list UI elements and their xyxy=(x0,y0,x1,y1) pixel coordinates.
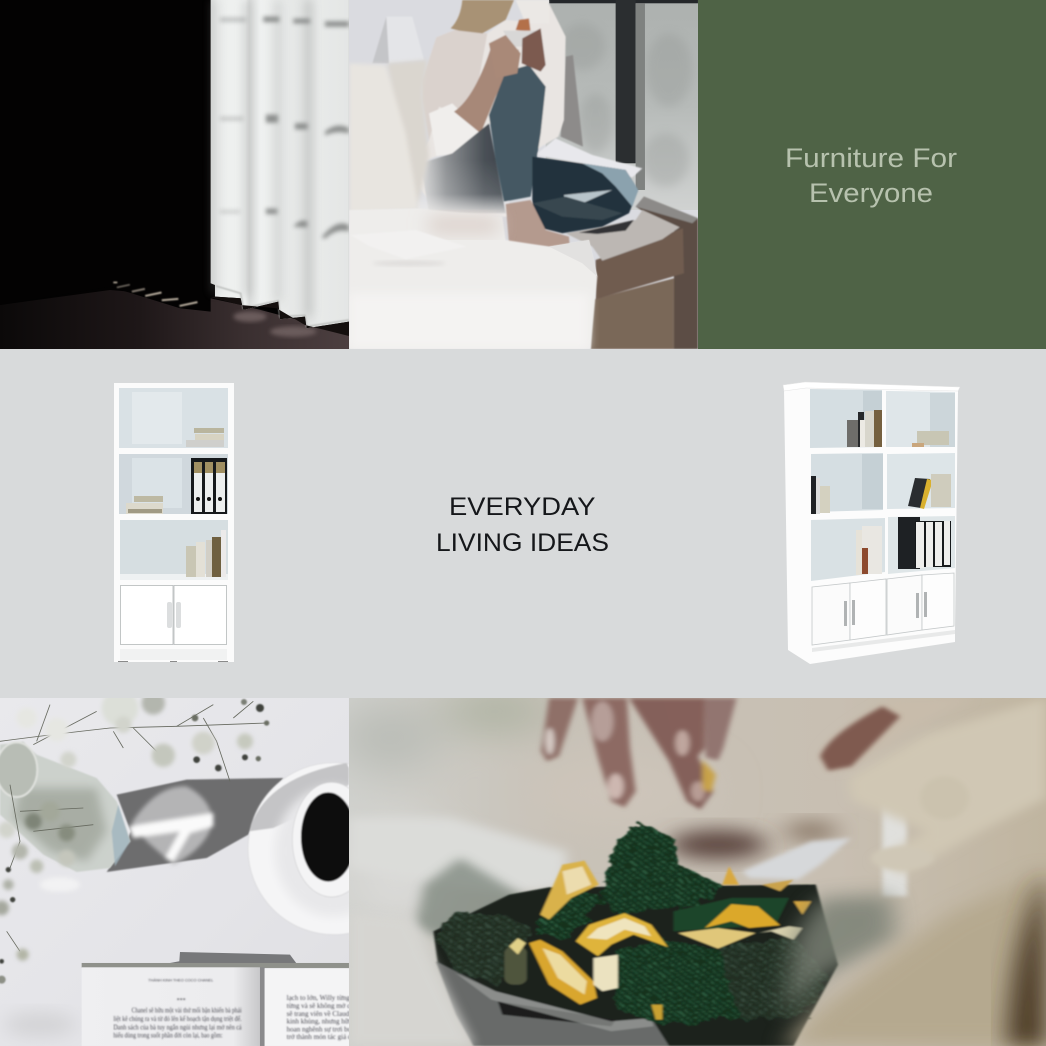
open book xyxy=(82,952,363,1046)
white throw xyxy=(349,208,597,349)
shelf compartments xyxy=(119,388,228,448)
arm xyxy=(454,43,519,133)
white sheer curtain xyxy=(211,0,349,328)
wall ornament xyxy=(372,17,424,63)
open book: THÀNH KINH THEO COCO CHANEL xyxy=(148,978,213,982)
glass vase xyxy=(0,741,131,892)
thigh xyxy=(421,123,506,213)
white stick xyxy=(882,790,907,896)
open book: liệt kê chúng ra và từ đó lên kế hoạch tận dụng triệt để. xyxy=(113,1015,242,1023)
panel: coffee and book flat lay xyxy=(0,698,349,1046)
lower leg xyxy=(532,157,638,233)
foot xyxy=(506,200,570,247)
books: top shelf xyxy=(186,428,224,447)
open book: từng và sẽ không mở cửa xyxy=(287,1002,357,1010)
door handles xyxy=(844,592,927,626)
left bookshelf xyxy=(114,383,234,662)
books: lower shelf xyxy=(186,530,226,577)
shelf compartments xyxy=(810,389,882,448)
panel: green title xyxy=(698,0,1046,349)
open book: hiểu dùng trong suốt phần đời còn lại, bao gồm: xyxy=(113,1032,223,1040)
left hand fingers xyxy=(541,698,737,810)
dark buds xyxy=(0,699,269,984)
heading: everyday living ideas: LIVING IDEAS xyxy=(436,529,609,557)
open book: Chanel sẽ hữu một vài thứ mối bận khiến bà phải xyxy=(132,1007,242,1015)
open book: Danh sách của bà tuy ngắn ngủi nhưng lại mở nên cả xyxy=(113,1023,242,1031)
black curtain xyxy=(125,291,211,312)
panel: salad and hands photo xyxy=(340,691,1046,1046)
pillow xyxy=(536,138,642,177)
coffee cup and saucer xyxy=(248,762,349,934)
mug and hands xyxy=(503,31,538,47)
open book: kinh khủng, nhưng hữu bởi xyxy=(287,1018,363,1026)
open book: lạch to lớn, Willy từng nhớ xyxy=(287,994,363,1002)
dark blur behind salad xyxy=(669,830,767,860)
woman xyxy=(416,0,642,247)
window xyxy=(546,0,698,210)
sofa cushion left xyxy=(349,60,429,213)
binders xyxy=(191,458,227,514)
pan xyxy=(433,885,838,1046)
panel: dark curtain photo xyxy=(0,0,349,349)
salad pan and ingredients xyxy=(433,821,838,1046)
lemon slices xyxy=(509,861,811,1020)
fork xyxy=(742,838,851,880)
open book: trở thành món tác giả đoạt xyxy=(287,1033,360,1041)
foreground blur xyxy=(349,871,1046,1046)
knee leg xyxy=(489,65,546,202)
baby's breath blossoms xyxy=(0,690,253,961)
cabinet doors xyxy=(120,586,226,644)
open book: *** xyxy=(177,998,186,1004)
heading: furniture for everyone: Furniture For xyxy=(785,143,957,173)
blurred background shapes xyxy=(349,698,544,914)
glass shadow xyxy=(107,778,283,872)
blurred greens left xyxy=(416,858,527,938)
panel: woman on sofa photo xyxy=(349,0,698,349)
right hand xyxy=(820,698,1046,875)
open book: hoan nghênh sự trơi buộc xyxy=(287,1025,358,1033)
hair xyxy=(451,0,514,33)
panel: grey shelf band xyxy=(0,349,1046,698)
sofa xyxy=(561,55,698,349)
books and binders xyxy=(811,410,951,575)
baby's breath stems xyxy=(0,701,267,951)
books: stacked xyxy=(126,496,163,514)
shirt xyxy=(416,3,566,207)
open book: sẽ trang viên về Claudine xyxy=(287,1010,358,1018)
cabinet doors xyxy=(812,573,954,645)
knife blade xyxy=(349,818,567,895)
greens xyxy=(436,821,829,1025)
right bookshelf xyxy=(783,382,960,664)
light gaps under curtain xyxy=(113,282,198,307)
floor xyxy=(0,290,349,349)
paper on throw xyxy=(422,233,444,240)
heading: everyday living ideas: EVERYDAY xyxy=(449,493,596,521)
heading: furniture for everyone: Everyone xyxy=(809,178,933,208)
right blurred greens xyxy=(785,895,896,1018)
